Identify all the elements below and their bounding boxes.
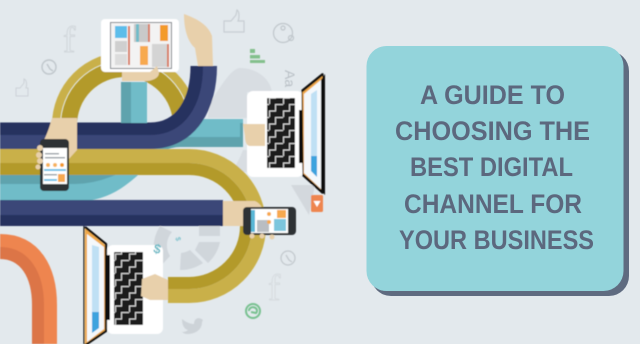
band: teal from right laptop bbox=[0, 130, 243, 190]
icon: palette bbox=[274, 24, 294, 42]
icon: globe bbox=[208, 68, 272, 172]
button: orange dropdown bbox=[311, 195, 323, 212]
fingers: right phone bbox=[250, 234, 274, 240]
icon: facebook upper: f bbox=[63, 20, 76, 61]
hand: under tablet bbox=[122, 66, 159, 81]
icon: clock lower bbox=[281, 251, 295, 265]
hand: on right keyboard bbox=[243, 124, 265, 146]
laptop screen bbox=[302, 74, 323, 193]
band: navy upper bbox=[0, 66, 210, 142]
band: olive arch bbox=[56, 56, 194, 125]
teal cuff bbox=[240, 123, 243, 147]
heading: YOUR BUSINESS bbox=[399, 225, 594, 255]
hand: upper right bbox=[184, 14, 213, 66]
icon: font size Aa: Aa bbox=[282, 70, 298, 87]
tablet bbox=[101, 19, 179, 72]
icon: thumbs up top bbox=[224, 10, 244, 32]
fingers: left phone bbox=[36, 145, 43, 170]
card: title panel bbox=[366, 46, 629, 296]
keyboard bbox=[267, 98, 295, 168]
laptop: right bbox=[247, 74, 325, 195]
card shadow bbox=[371, 51, 629, 296]
hand: holding phone right bbox=[223, 201, 264, 226]
band: navy lower bbox=[0, 200, 223, 226]
band: olive U bbox=[0, 156, 259, 296]
icon: dollar: $ bbox=[152, 241, 163, 257]
card face bbox=[366, 46, 624, 291]
laptop hinge bbox=[299, 110, 303, 163]
icon: twitter bbox=[182, 318, 203, 334]
heading: A GUIDE TO bbox=[420, 80, 565, 110]
icon: facebook lower: f bbox=[268, 268, 281, 309]
heading bbox=[395, 80, 594, 255]
lower keyboard bbox=[114, 252, 143, 325]
icon: green circle bbox=[246, 304, 260, 318]
illustration bbox=[0, 10, 325, 344]
icon: clock upper bbox=[42, 60, 56, 74]
icon: green bars bbox=[250, 49, 265, 63]
band: teal arm bbox=[121, 82, 147, 123]
laptop: lower bbox=[84, 226, 163, 344]
heading: CHOOSING THE bbox=[395, 116, 590, 146]
phone: right bbox=[243, 207, 296, 235]
icon: grey triangle shadow bbox=[291, 185, 315, 215]
lower hinge bbox=[106, 255, 110, 320]
heading: CHANNEL FOR bbox=[404, 189, 582, 219]
heading: BEST DIGITAL bbox=[410, 152, 573, 182]
icon: small dollar: $ bbox=[174, 237, 181, 242]
hand: on lower keyboard bbox=[141, 274, 168, 300]
chart: grey donut bbox=[154, 226, 220, 270]
band: orange bbox=[0, 241, 50, 344]
icon: thumbs up left bbox=[16, 79, 28, 96]
hand: holding phone left bbox=[42, 118, 77, 160]
phone: left bbox=[40, 139, 69, 191]
lower screen bbox=[85, 228, 105, 344]
